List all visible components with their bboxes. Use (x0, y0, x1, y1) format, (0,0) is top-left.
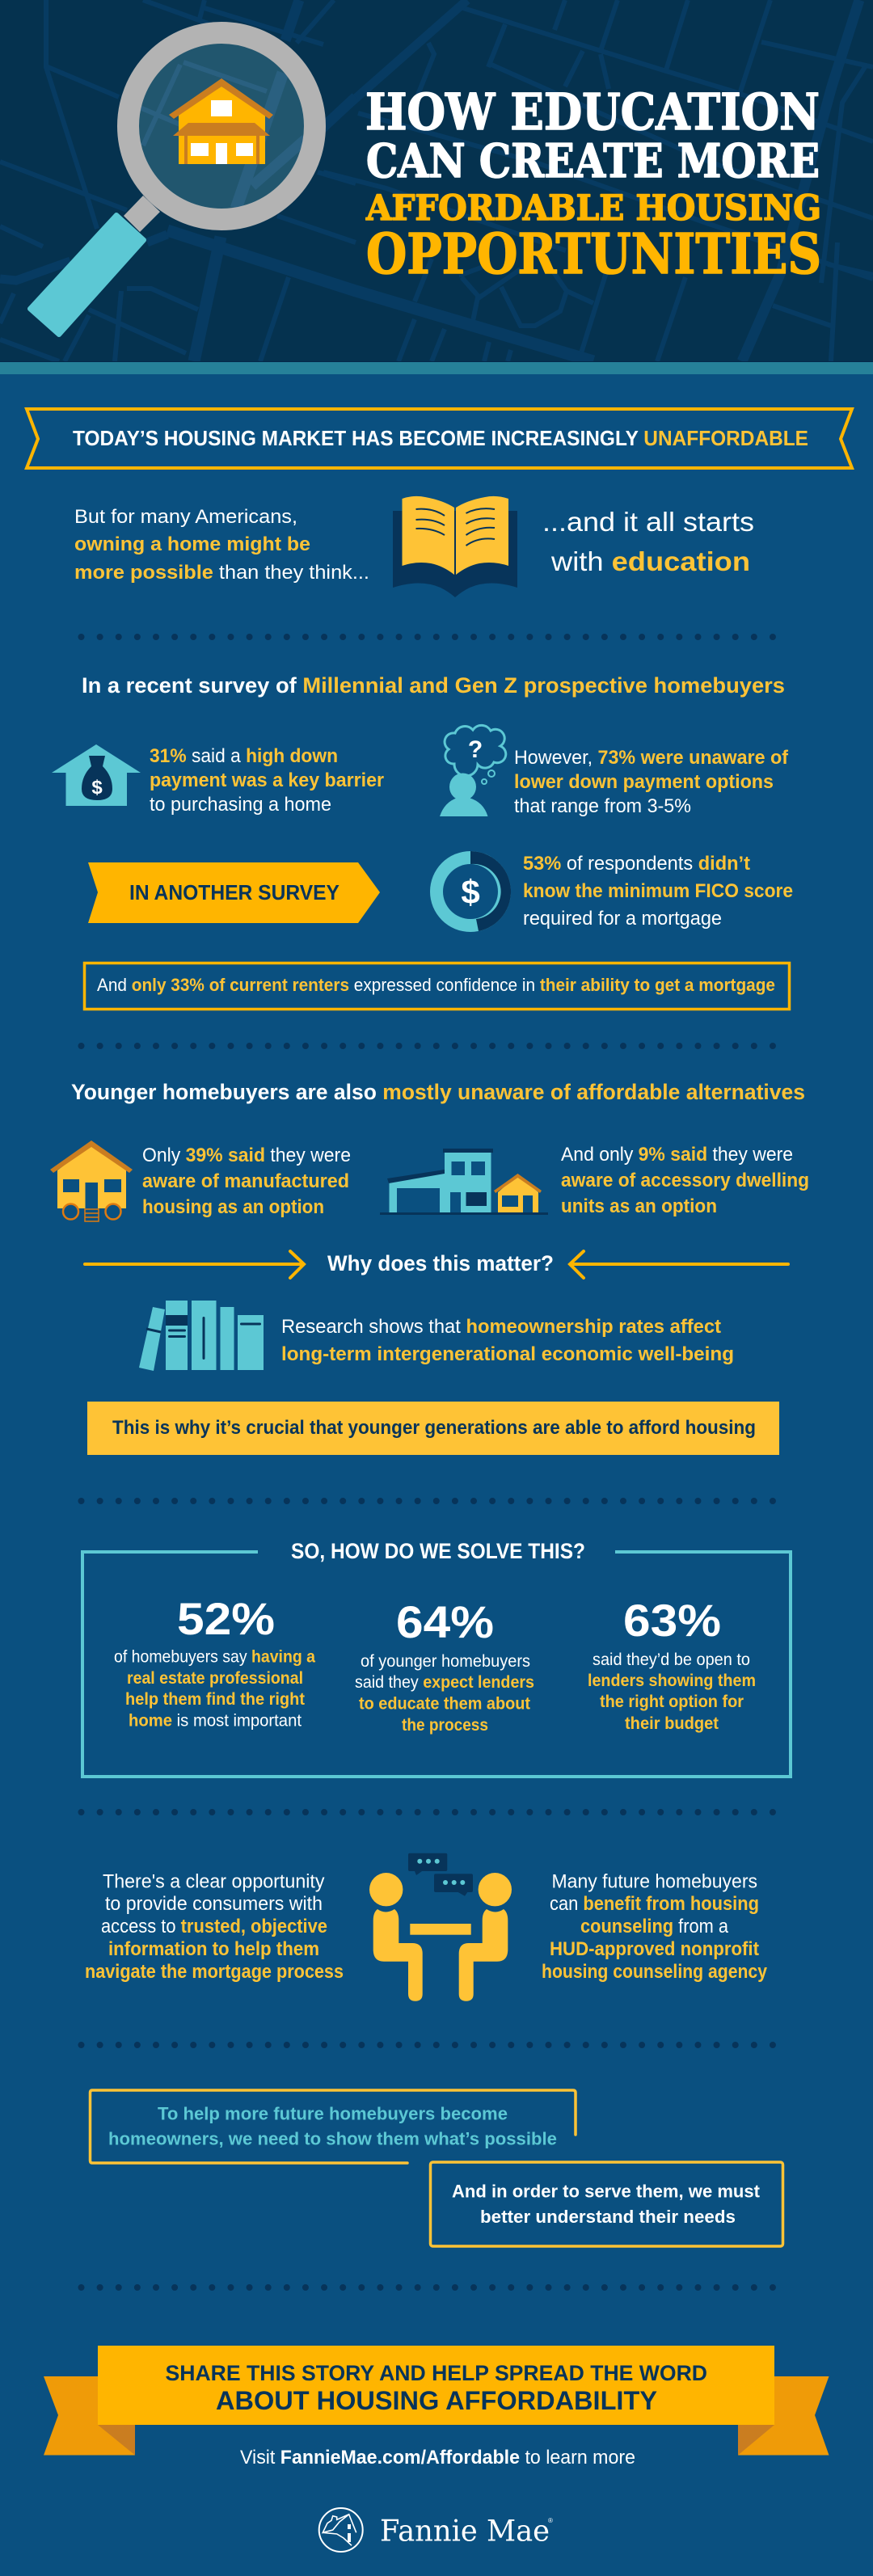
stat: 63 percent: their budget (625, 1714, 719, 1733)
text: high down payment: to purchasing a home (150, 794, 331, 816)
callout: renters confidence: And only 33% of current renters expressed confidence in their ability to get a mortgage (97, 975, 775, 995)
callout: show them what's possible: To help more future homebuyers become (158, 2103, 508, 2124)
text: housing counseling: housing counseling agency (542, 1961, 767, 1983)
text: starts with education (542, 507, 754, 576)
icon: manufactured house (50, 1140, 133, 1221)
icon: thinking person (440, 725, 506, 816)
arrow: right (570, 1251, 788, 1278)
icon: donut chart with dollar (430, 851, 511, 932)
text: manufactured housing: aware of manufactured (142, 1170, 349, 1192)
callout: understand their needs: better understand their needs (480, 2207, 736, 2227)
text: owning a home (74, 506, 369, 584)
stat: 52 percent: 52% (177, 1593, 275, 1644)
text: FICO score: 53% of respondents didn’t (523, 853, 750, 875)
icon: two people talking at a table (369, 1853, 512, 2001)
icon: open book (393, 496, 517, 597)
banner: market unaffordable (27, 409, 852, 468)
text: clear opportunity (85, 1870, 344, 1983)
stat: 64 percent (355, 1596, 534, 1735)
panel: how do we solve this (82, 1539, 791, 1777)
stat: 64 percent: said they expect lenders (355, 1672, 534, 1692)
dotted divider (81, 1809, 791, 1815)
text: accessory dwelling units: And only 9% said they were (561, 1144, 793, 1166)
text: high down payment: 31% said a high down (150, 745, 338, 767)
icon: house with money bag: $ (91, 777, 103, 799)
text: housing counseling: HUD-approved nonprofit (550, 1938, 759, 1960)
callout: younger generations: This is why it’s crucial that younger generations are able to afford housing (112, 1417, 756, 1439)
title (365, 82, 821, 287)
title: AFFORDABLE HOUSING (365, 188, 821, 229)
text: FICO score: know the minimum FICO score (523, 880, 793, 902)
text: why does this matter: Why does this matter? (327, 1251, 554, 1275)
icon: thinking person: ? (468, 736, 483, 763)
stat: 52 percent (114, 1593, 316, 1730)
callout: understand their needs: And in order to serve them, we must (452, 2181, 760, 2202)
stat: 64 percent: 64% (396, 1596, 494, 1647)
dotted divider (81, 1043, 791, 1049)
text: clear opportunity: There's a clear opportunity (103, 1870, 325, 1893)
ribbon: share this story: ABOUT HOUSING AFFORDABILITY (216, 2386, 657, 2415)
heading: unaware of alternatives: Younger homebuyers are also mostly unaware of affordable alternatives (71, 1080, 805, 1104)
text: FICO score: required for a mortgage (523, 908, 722, 930)
logo: Fannie Mae: Fannie Mae (380, 2515, 550, 2548)
text: visit link: Visit FannieMae.com/Affordable to learn more (240, 2447, 635, 2468)
callout: show them what's possible (91, 2090, 576, 2163)
text: clear opportunity: information to help them (108, 1938, 319, 1960)
text: unaware of options (514, 747, 789, 817)
text: clear opportunity: to provide consumers with (105, 1893, 323, 1915)
text: clear opportunity: navigate the mortgage process (85, 1961, 344, 1983)
text: accessory dwelling units: aware of accessory dwelling (561, 1170, 809, 1191)
arrow: left (85, 1251, 304, 1278)
text: manufactured housing: housing as an option (142, 1196, 324, 1218)
icon: modern house with accessory dwelling (380, 1149, 548, 1215)
arrow banner: in another survey (88, 862, 380, 923)
callout: renters confidence (84, 963, 789, 1009)
stat: 63 percent: lenders showing them (588, 1671, 756, 1690)
text: manufactured housing: Only 39% said they were (142, 1145, 351, 1166)
callout: understand their needs (430, 2162, 782, 2246)
text: clear opportunity: access to trusted, objective (101, 1916, 327, 1937)
text: accessory dwelling units (561, 1144, 809, 1217)
icon: donut chart with dollar: $ (461, 873, 480, 911)
stat: 52 percent: real estate professional (127, 1668, 303, 1688)
callout: younger generations (87, 1402, 779, 1455)
logo: Fannie Mae: ® (548, 2517, 553, 2524)
text: housing counseling: Many future homebuyers (551, 1870, 757, 1893)
banner: market unaffordable: TODAY’S HOUSING MARKET HAS BECOME INCREASINGLY UNAFFORDABLE (73, 426, 808, 450)
text: high down payment: payment was a key barrier (150, 769, 384, 791)
text: unaware of options: However, 73% were unaware of (514, 747, 789, 769)
title: HOW EDUCATION (365, 82, 820, 141)
text: accessory dwelling units: units as an option (561, 1195, 717, 1217)
stat: 64 percent: of younger homebuyers (361, 1651, 530, 1671)
text: owning a home: But for many Americans, (74, 506, 297, 528)
stat: 64 percent: to educate them about (359, 1694, 530, 1714)
dotted divider (81, 634, 791, 640)
text: research shows: long-term intergenerational economic well-being (281, 1343, 734, 1365)
callout: show them what's possible: homeowners, we need to show them what’s possible (108, 2129, 557, 2148)
stat: 63 percent: 63% (623, 1595, 721, 1646)
text: housing counseling: can benefit from housing (550, 1893, 759, 1915)
text: owning a home: owning a home might be (74, 533, 310, 555)
text: housing counseling: counseling from a (580, 1916, 728, 1937)
text: manufactured housing (142, 1145, 351, 1218)
arrow banner: in another survey: IN ANOTHER SURVEY (129, 880, 340, 904)
logo: Fannie Mae (319, 2508, 553, 2552)
text: unaware of options: that range from 3-5% (514, 795, 691, 817)
panel: header (0, 0, 873, 374)
text: research shows: Research shows that homeownership rates affect (281, 1316, 721, 1338)
ribbon: share this story: SHARE THIS STORY AND HELP SPREAD THE WORD (165, 2361, 707, 2385)
dotted divider (81, 2042, 791, 2048)
stat: 63 percent (588, 1595, 756, 1733)
icon: house with money bag (52, 744, 141, 806)
stat: 63 percent: the right option for (600, 1692, 744, 1711)
stat: 52 percent: help them find the right (125, 1689, 305, 1709)
text: research shows (281, 1316, 734, 1365)
stat: 52 percent: of homebuyers say having a (114, 1647, 316, 1667)
dotted divider (81, 2284, 791, 2291)
text: FICO score (523, 853, 793, 930)
text: unaware of options: lower down payment options (514, 771, 774, 793)
heading: recent survey: In a recent survey of Millennial and Gen Z prospective homebuyers (82, 673, 785, 698)
text: owning a home: more possible than they think... (74, 562, 369, 584)
stat: 64 percent: the process (402, 1715, 488, 1735)
stat: 63 percent: said they’d be open to (593, 1650, 750, 1669)
stat: 52 percent: home is most important (129, 1710, 302, 1730)
text: starts with education: ...and it all starts (542, 507, 754, 537)
icon: books (139, 1301, 264, 1371)
text: starts with education: with education (550, 546, 750, 576)
ribbon: share this story (44, 2346, 829, 2456)
text: housing counseling (542, 1870, 767, 1983)
dotted divider (81, 1498, 791, 1504)
heading: so how do we solve this: SO, HOW DO WE SOLVE THIS? (291, 1539, 585, 1563)
text: high down payment (150, 745, 384, 816)
icon: magnifying glass with house (30, 32, 315, 335)
